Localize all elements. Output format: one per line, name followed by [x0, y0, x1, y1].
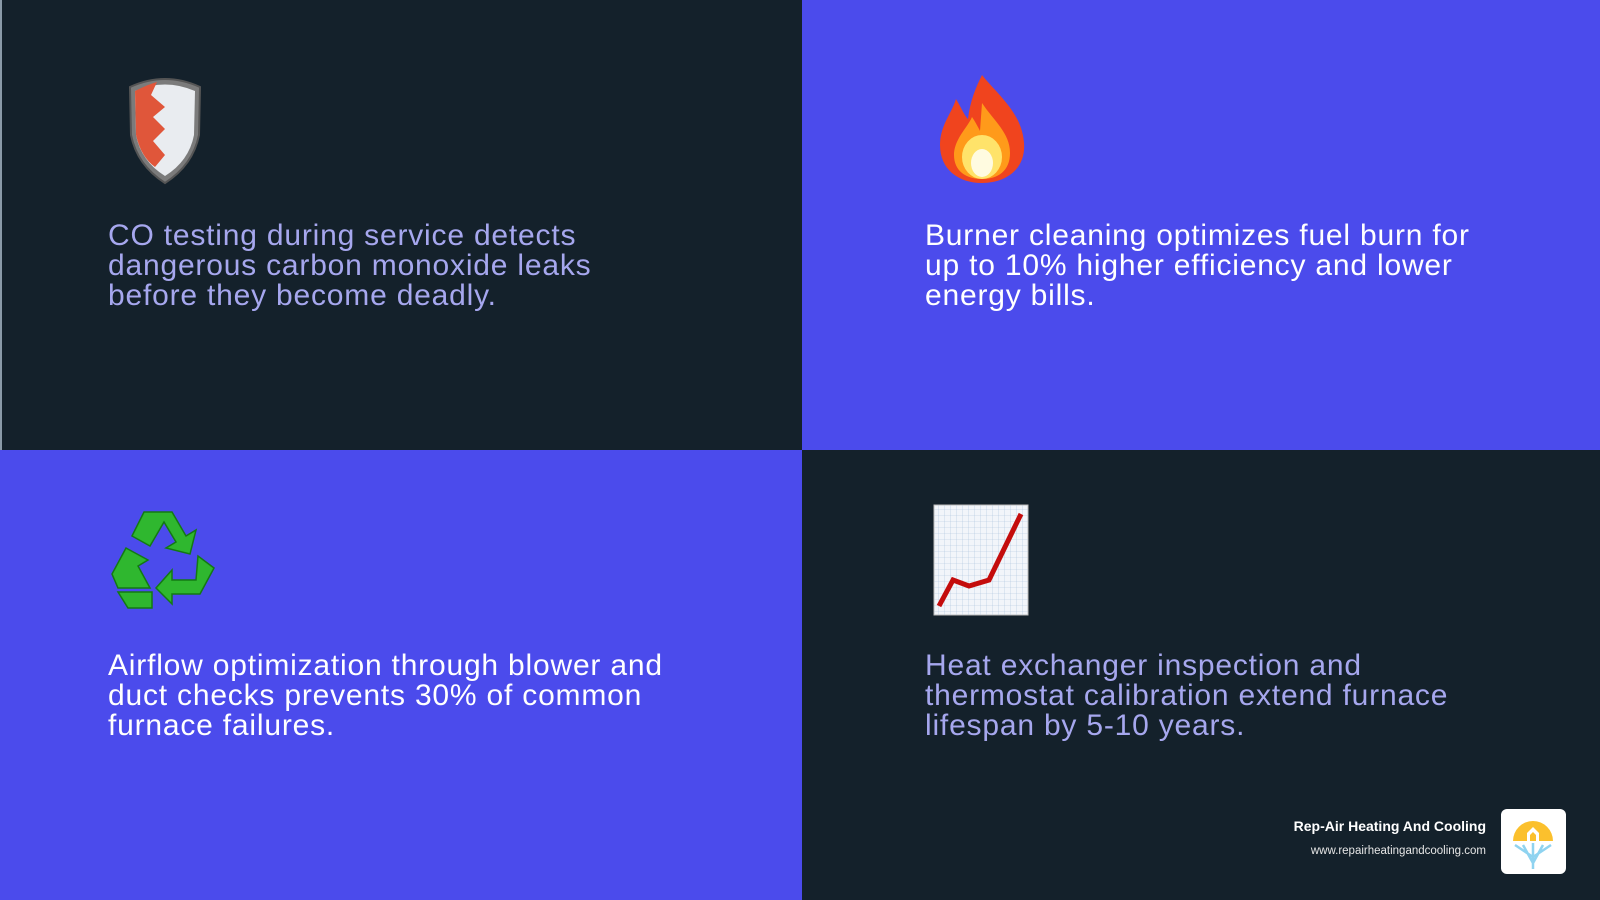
text: heat exchanger — [925, 649, 1448, 742]
text: burner cleaning: Burner cleaning optimizes fuel burn for — [925, 219, 1470, 252]
text: airflow — [108, 649, 663, 742]
text: CO testing: before they become deadly. — [108, 279, 497, 312]
icon: fire — [940, 75, 1024, 183]
text: burner cleaning — [925, 219, 1470, 312]
text: airflow: duct checks prevents 30% of common — [108, 679, 642, 712]
logo — [1501, 809, 1566, 874]
text: heat exchanger: lifespan by 5-10 years. — [925, 709, 1245, 742]
text: heat exchanger: Heat exchanger inspection and — [925, 649, 1362, 682]
text: heat exchanger: thermostat calibration extend furnace — [925, 679, 1448, 712]
text: CO testing: CO testing during service detects — [108, 219, 576, 252]
text: CO testing — [108, 219, 591, 312]
panel: heat exchanger — [802, 450, 1600, 900]
text: airflow: furnace failures. — [108, 709, 335, 742]
brand url: www.repairheatingandcooling.com — [1311, 845, 1486, 857]
icon: shield — [129, 78, 201, 184]
text: burner cleaning: energy bills. — [925, 279, 1095, 312]
text: airflow: Airflow optimization through blower and — [108, 649, 663, 682]
brand block — [1294, 809, 1566, 874]
icon: recycle — [111, 511, 215, 609]
panel: CO testing — [0, 0, 802, 450]
brand name: Rep-Air Heating And Cooling — [1294, 818, 1486, 834]
panel: burner cleaning — [802, 0, 1600, 450]
icon: chart — [934, 504, 1028, 616]
panel: airflow — [0, 450, 802, 900]
text: burner cleaning: up to 10% higher efficiency and lower — [925, 249, 1453, 282]
text: CO testing: dangerous carbon monoxide leaks — [108, 249, 591, 282]
